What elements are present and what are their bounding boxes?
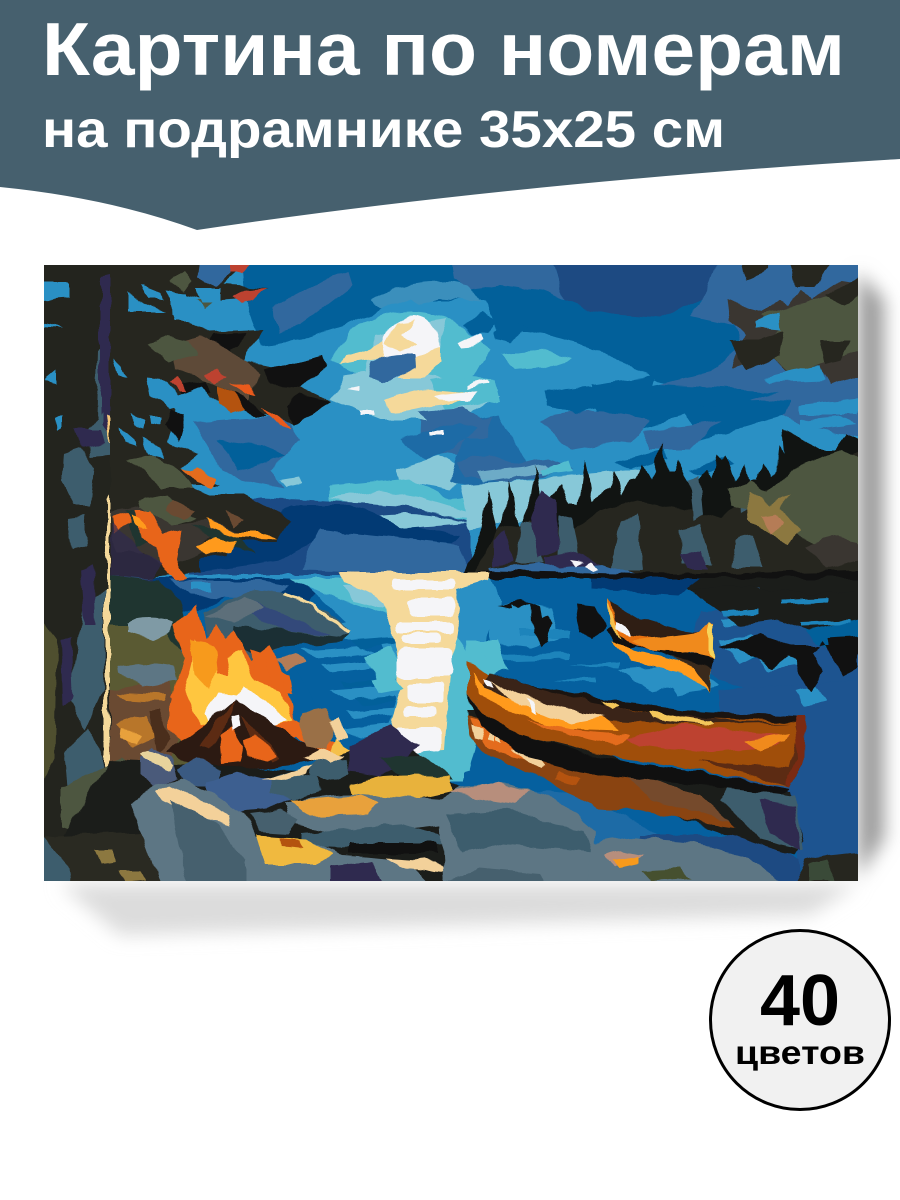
painting: [44, 265, 858, 881]
rocks: [44, 724, 858, 881]
canvas shadow: [60, 272, 884, 935]
canoe: small: [607, 598, 714, 659]
banner header: [0, 0, 900, 230]
title: Картина по номерам: [42, 7, 845, 91]
canoe reflections: [467, 640, 803, 855]
shore left: [60, 575, 188, 829]
clouds highlights: [280, 336, 490, 487]
badge number: 40: [760, 961, 840, 1041]
moon reflection: [340, 572, 490, 752]
water: [143, 570, 858, 881]
tree branches: [110, 240, 331, 580]
subtitle: на подрамнике 35х25 см: [42, 101, 725, 159]
left tree trunk: [44, 265, 112, 838]
painting: sky: [117, 265, 858, 580]
badge: color count: [710, 930, 890, 1110]
right upper tree: [728, 265, 858, 384]
canoe: large: [467, 662, 805, 793]
distant forest: [464, 429, 858, 580]
campfire: [112, 605, 360, 770]
tree reflections: [495, 601, 638, 650]
icon: moon: [345, 316, 480, 436]
large rock behind fire: [205, 590, 349, 670]
badge label: цветов: [735, 1034, 865, 1071]
